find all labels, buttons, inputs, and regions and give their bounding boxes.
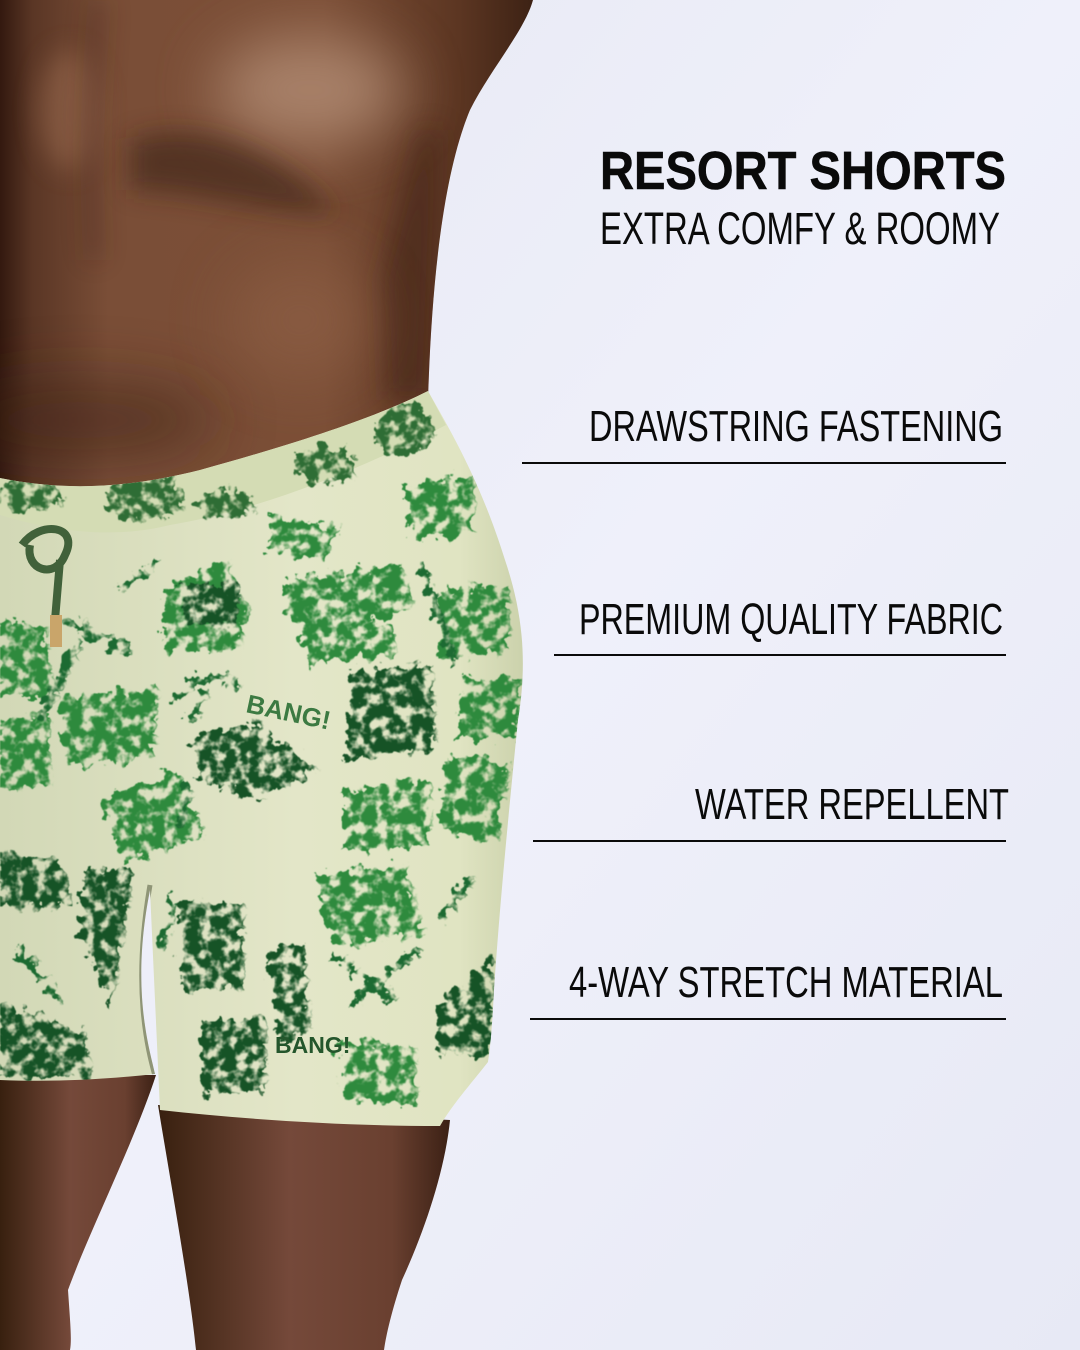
oblique highlight: [252, 278, 380, 362]
drawstring: [22, 529, 68, 620]
right leg: [158, 1105, 450, 1350]
shorts: [0, 380, 540, 1140]
side shadow: [380, 130, 440, 400]
chest highlight: [215, 35, 405, 145]
green patches: [0, 475, 522, 1105]
navel: [83, 235, 107, 251]
rib shadow: [130, 133, 340, 215]
brand wordmark lower: BANG!: [275, 1032, 350, 1058]
drawstring tip: [50, 615, 62, 647]
dark print patches: [0, 585, 494, 1092]
palm and small marks: [20, 560, 470, 1000]
abs highlight: [40, 50, 100, 170]
lower ab shadow: [0, 380, 220, 460]
title: RESORT SHORTS: [600, 141, 1006, 201]
left leg: [0, 1075, 156, 1350]
waistband: [0, 391, 446, 532]
torso: [0, 0, 533, 486]
crotch shadow: [142, 885, 155, 1076]
centre ab line: [92, 0, 100, 260]
pattern: toile print clusters: [0, 475, 522, 1105]
brand wordmark: BANG!: [244, 689, 333, 736]
waistband print: [0, 406, 435, 520]
